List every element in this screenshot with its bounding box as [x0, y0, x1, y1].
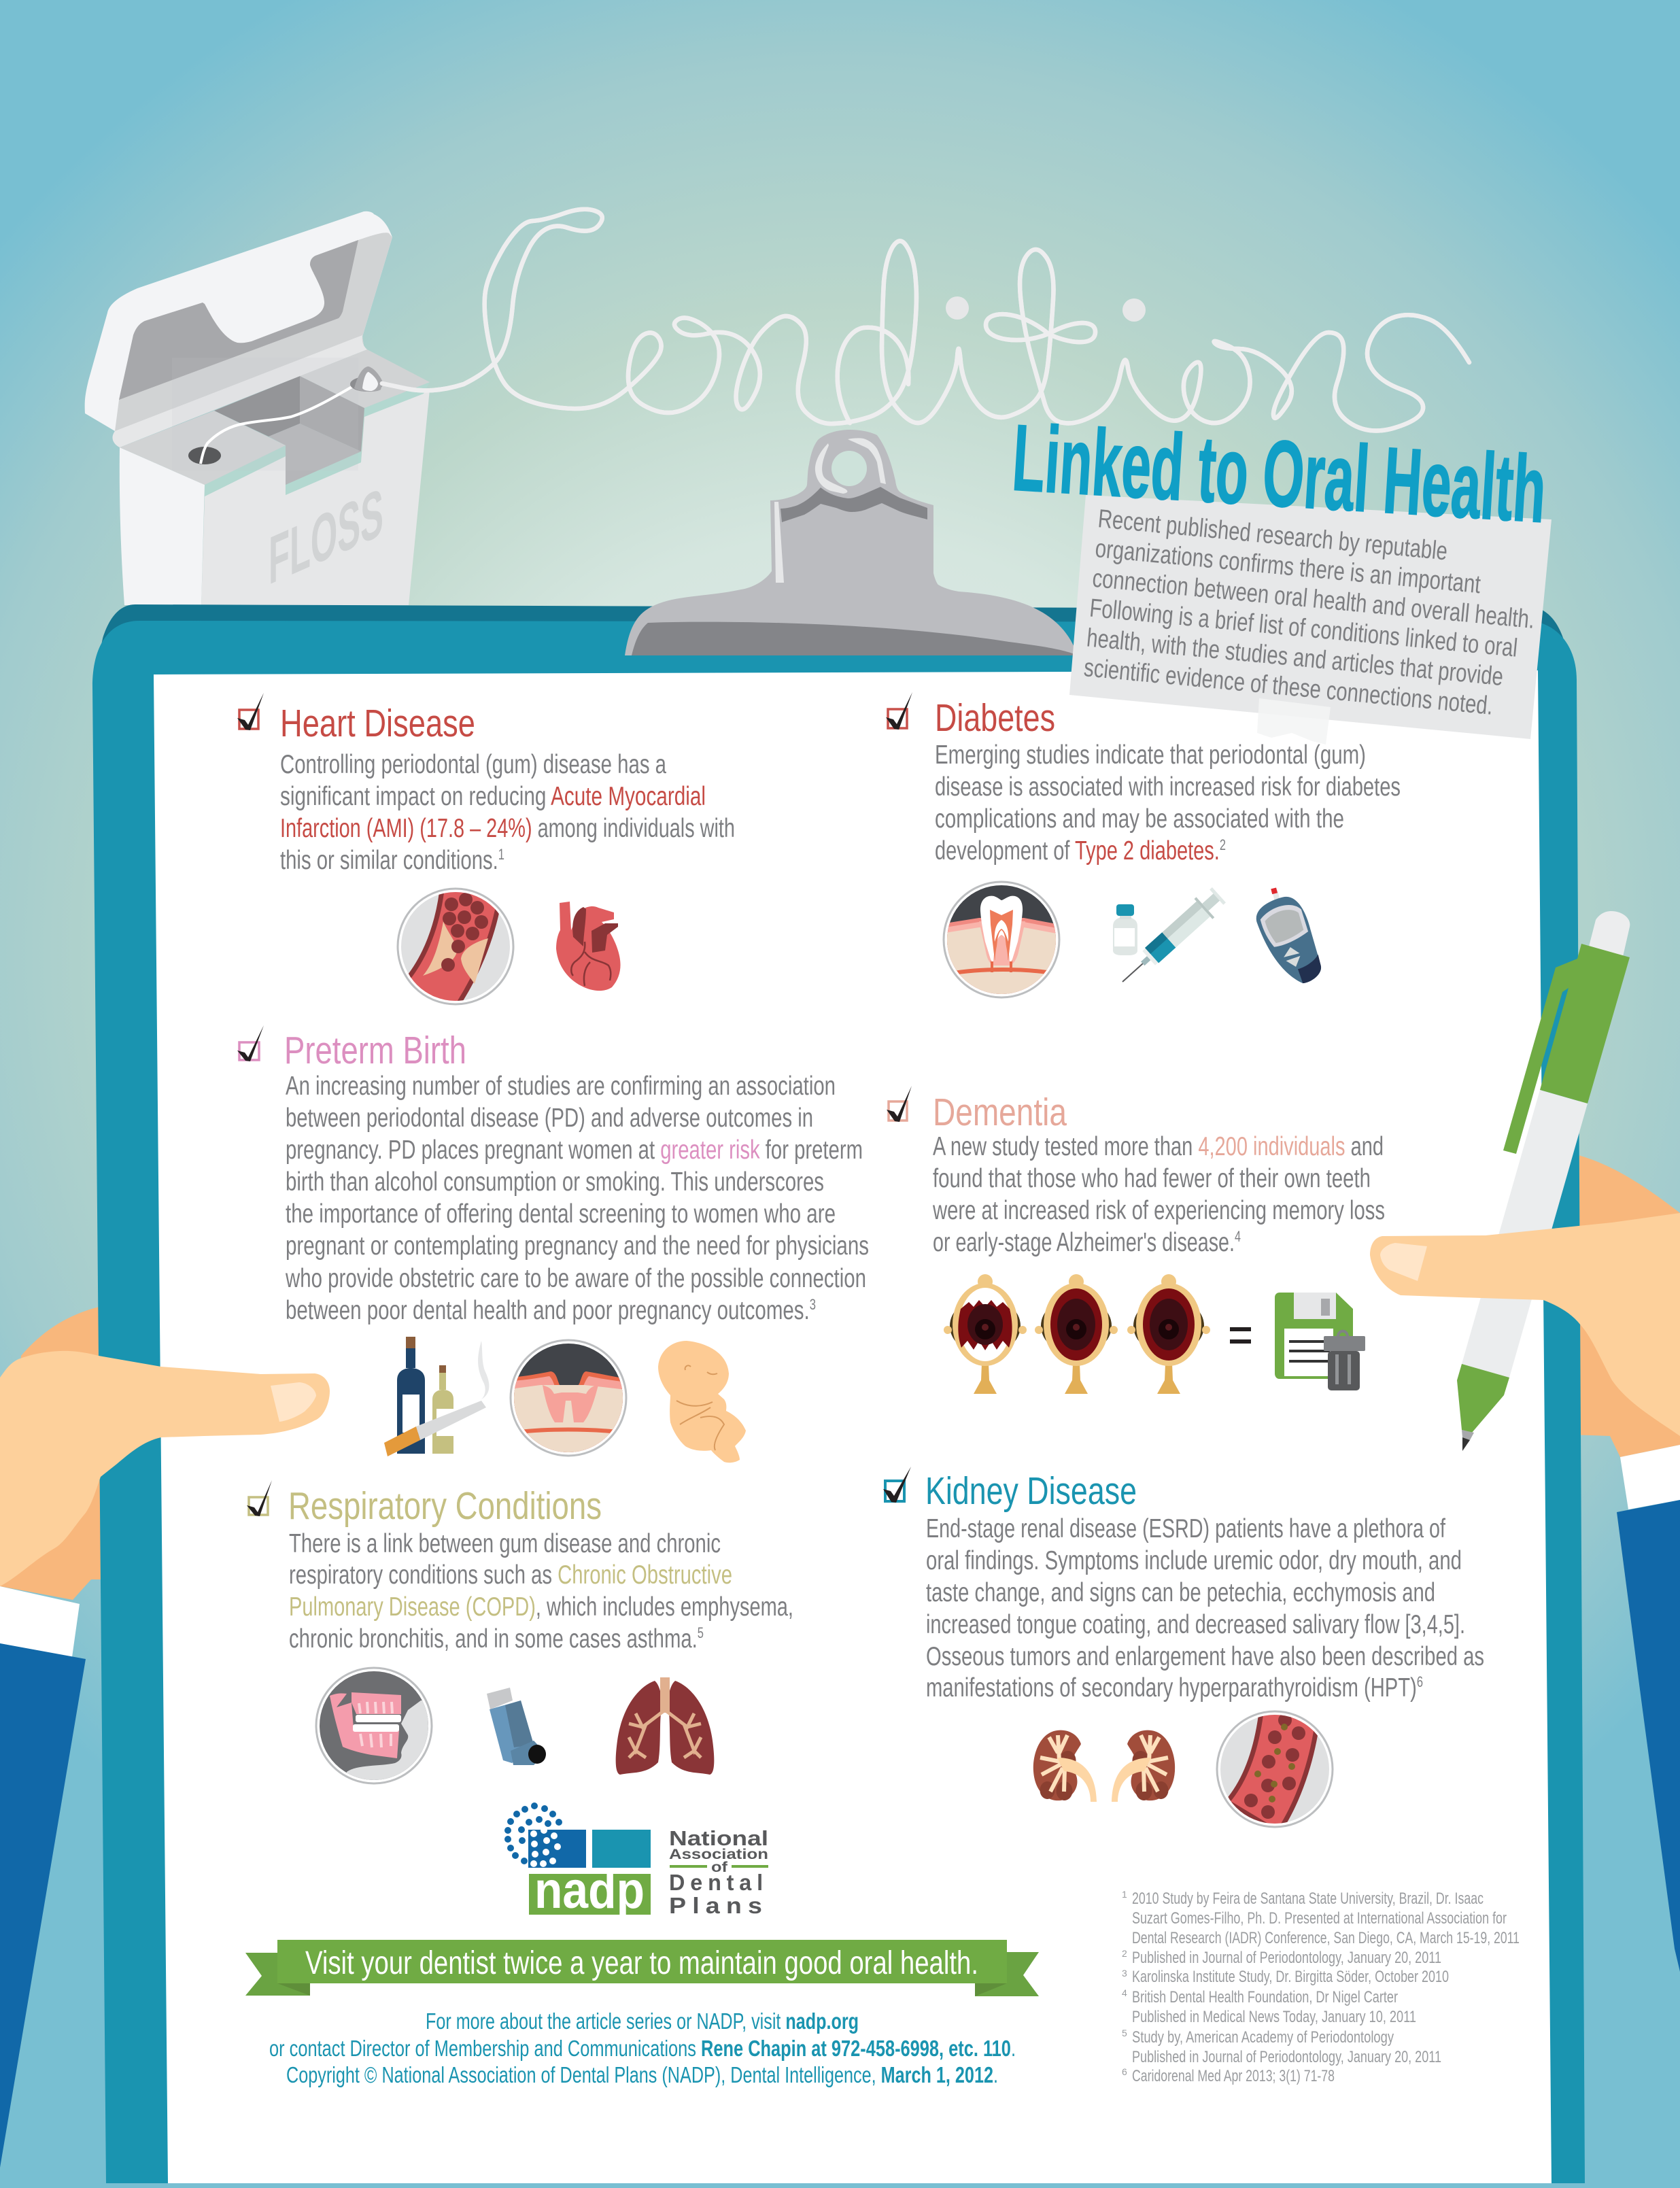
icon: syringe	[1114, 885, 1228, 992]
icon: glucose meter	[1250, 882, 1324, 991]
left shirt cuff	[0, 1586, 80, 1657]
body text: A new study tested more than 4,200 individuals and	[933, 1132, 1384, 1161]
body text: were at increased risk of experiencing memory loss	[932, 1196, 1385, 1225]
NADP logo	[504, 1802, 768, 1919]
floss ribbon lettering: Conditions: Conditions	[490, 223, 1469, 451]
label: FLOSS: FLOSS	[269, 473, 383, 599]
body text: this or similar conditions.	[280, 846, 570, 875]
NADP logo: nadp	[534, 1862, 645, 1919]
body text: who provide obstetric care to be aware of the possible connection	[285, 1264, 866, 1293]
checkbox	[237, 1025, 264, 1061]
panel: diabetes	[886, 692, 1401, 999]
footnotes: Caridorenal Med Apr 2013; 3(1) 71-78	[1132, 2067, 1335, 2085]
body text: Emerging studies indicate that periodontal (gum)	[935, 740, 1366, 770]
body text: between poor dental health and poor pregnancy outcomes.	[286, 1296, 978, 1325]
NADP logo: Association	[669, 1847, 768, 1862]
icon: pen	[1457, 911, 1630, 1451]
icon: mirror with no teeth	[1035, 1274, 1118, 1394]
intro text: Following is a brief list of conditions linked to oral	[1088, 594, 1519, 663]
NADP logo: of	[711, 1860, 728, 1875]
icon: jaw	[316, 1666, 435, 1783]
body text	[280, 750, 735, 875]
checkbox	[883, 1467, 911, 1503]
footnotes: British Dental Health Foundation, Dr Nigel Carter	[1132, 1988, 1398, 2006]
footer contact text: For more about the article series or NADP, visit nadp.org	[426, 2008, 859, 2034]
footnotes: 4	[1122, 1987, 1127, 1998]
checkbox	[247, 1480, 272, 1516]
tape	[1257, 698, 1331, 745]
body text: 3	[810, 1296, 816, 1313]
footer contact text	[269, 2008, 1016, 2087]
NADP logo: Plans	[669, 1893, 768, 1918]
heading: Respiratory Conditions	[288, 1484, 602, 1528]
intro text	[1082, 505, 1541, 723]
heading: Kidney Disease	[925, 1469, 1137, 1513]
body text: manifestations of secondary hyperparathyroidism (HPT)	[926, 1673, 1582, 1703]
footnotes: 6	[1122, 2066, 1127, 2077]
body text: complications and may be associated with the	[935, 804, 1344, 834]
body text	[926, 1514, 1484, 1703]
body text: disease is associated with increased risk for diabetes	[935, 772, 1401, 802]
body text: taste change, and signs can be petechia, ecchymosis and	[926, 1578, 1435, 1607]
heading: Diabetes	[935, 696, 1055, 740]
body text: significant impact on reducing Acute Myocardial	[280, 782, 706, 811]
icon: floppy disk and trash	[1275, 1293, 1365, 1390]
icon: mirror with teeth	[944, 1274, 1027, 1394]
heading: Heart Disease	[280, 702, 475, 745]
body text: Pulmonary Disease (COPD), which includes emphysema,	[289, 1592, 793, 1622]
right sleeve	[1617, 1500, 1680, 1972]
icon: blocked artery	[398, 884, 513, 1013]
footnotes: Study by, American Academy of Periodontology	[1132, 2028, 1394, 2047]
body text: pregnancy. PD places pregnant women at greater risk for preterm	[286, 1135, 863, 1165]
footnotes: Dental Research (IADR) Conference, San Diego, CA, March 15-19, 2011	[1132, 1929, 1520, 1947]
body text: 4	[1235, 1228, 1241, 1245]
clipboard board	[92, 604, 1585, 2183]
icon: right hand finger	[1370, 1213, 1680, 1436]
body text: End-stage renal disease (ESRD) patients have a plethora of	[926, 1514, 1445, 1543]
heading: Preterm Birth	[284, 1029, 466, 1072]
body text: birth than alcohol consumption or smoking. This underscores	[286, 1167, 824, 1197]
footnotes: 2010 Study by Feira de Santana State University, Brazil, Dr. Isaac	[1132, 1890, 1484, 1908]
body text: Infarction (AMI) (17.8 – 24%) among individuals with	[280, 814, 735, 843]
icon: back of left hand	[0, 1305, 109, 1600]
body text: pregnant or contemplating pregnancy and the need for physicians	[286, 1231, 869, 1261]
footnotes: 2	[1122, 1948, 1127, 1959]
body text	[285, 1072, 869, 1325]
NADP logo: National	[669, 1826, 768, 1850]
icon: blood vessel	[1217, 1707, 1333, 1832]
body text: or early-stage Alzheimer's disease.	[933, 1228, 1343, 1257]
footnotes: 1	[1122, 1889, 1127, 1900]
panel: heart disease	[237, 693, 735, 1013]
banner: Visit your dentist twice a year to maintain good oral health.	[305, 1945, 978, 1981]
panel: dementia	[887, 1086, 1385, 1394]
body text: found that those who had fewer of their own teeth	[933, 1164, 1371, 1193]
footnotes: Published in Medical News Today, January 10, 2011	[1132, 2008, 1416, 2026]
body text: An increasing number of studies are confirming an association	[286, 1072, 836, 1101]
heading: Dementia	[933, 1091, 1067, 1134]
body text: There is a link between gum disease and chronic	[289, 1529, 721, 1558]
body text: Osseous tumors and enlargement have also been described as	[926, 1642, 1484, 1671]
body text	[935, 740, 1401, 866]
footnotes: Published in Journal of Periodontology, January 20, 2011	[1132, 1949, 1441, 1967]
banner	[245, 1940, 1039, 1996]
icon: medicine vial	[1113, 904, 1137, 955]
icon: back of right hand	[1571, 1153, 1680, 1457]
icon: bottles and cigarette	[384, 1337, 489, 1456]
intro text: scientific evidence of these connections noted.	[1082, 653, 1494, 721]
checkbox	[887, 1086, 912, 1122]
icon: inhaler	[487, 1688, 546, 1765]
body text: between periodontal disease (PD) and adverse outcomes in	[286, 1104, 813, 1133]
checkbox	[237, 693, 264, 730]
body text: 2	[1220, 836, 1226, 853]
NADP logo: Dental	[669, 1870, 768, 1895]
body text	[289, 1529, 793, 1654]
clipboard paper	[154, 670, 1552, 2183]
icon: receding gum	[510, 1339, 627, 1456]
icon: floss box	[85, 211, 430, 605]
panel: preterm birth	[237, 1025, 869, 1463]
panel: kidney disease	[883, 1467, 1484, 1832]
icon: fetus	[658, 1341, 746, 1463]
footnotes: Suzart Gomes-Filho, Ph. D. Presented at International Association for	[1132, 1909, 1507, 1928]
footnotes: Published in Journal of Periodontology, January 20, 2011	[1132, 2048, 1441, 2066]
icon: healthy tooth	[944, 882, 1061, 999]
intro text: health, with the studies and articles that provide	[1086, 623, 1505, 691]
icon: second mirror with no teeth	[1127, 1274, 1210, 1394]
right shirt cuff	[1620, 1445, 1680, 1509]
intro text: organizations confirms there is an important	[1094, 534, 1482, 599]
sticky note with intro	[1069, 495, 1552, 745]
body text: Controlling periodontal (gum) disease has a	[280, 750, 666, 779]
body text: oral findings. Symptoms include uremic odor, dry mouth, and	[926, 1546, 1462, 1575]
icon: heart	[556, 902, 621, 991]
body text	[932, 1132, 1385, 1257]
body text: 1	[498, 846, 504, 863]
intro text: Recent published research by reputable	[1097, 505, 1449, 566]
footer contact text: or contact Director of Membership and Communications Rene Chapin at 972-458-6998, etc. 110.	[269, 2036, 1016, 2061]
body text: 6	[1417, 1673, 1423, 1690]
checkbox	[886, 692, 912, 730]
icon: left hand finger	[0, 1351, 330, 1586]
intro text: connection between oral health and overall health.	[1091, 564, 1536, 634]
body text: chronic bronchitis, and in some cases asthma.	[289, 1624, 833, 1654]
icon: kidneys	[1033, 1730, 1175, 1802]
body text: development of Type 2 diabetes.	[935, 836, 1269, 866]
icon: lungs	[616, 1677, 714, 1775]
left sleeve	[0, 1643, 86, 2168]
footnotes	[1122, 1889, 1520, 2085]
panel: respiratory conditions	[247, 1480, 793, 1783]
body text: increased tongue coating, and decreased salivary flow [3,4,5].	[926, 1610, 1465, 1639]
footnotes: 3	[1122, 1968, 1127, 1979]
body text: 5	[698, 1624, 704, 1641]
body text: the importance of offering dental screening to women who are	[286, 1199, 836, 1229]
body text: respiratory conditions such as Chronic Obstructive	[289, 1560, 732, 1590]
footer contact text: Copyright © National Association of Dental Plans (NADP), Dental Intelligence, March 1, 2012.	[286, 2062, 998, 2087]
footnotes: 5	[1122, 2028, 1127, 2038]
icon: metal clip	[625, 430, 1078, 655]
footnotes: Karolinska Institute Study, Dr. Birgitta Söder, October 2010	[1132, 1968, 1449, 1986]
equals sign	[1230, 1327, 1251, 1344]
